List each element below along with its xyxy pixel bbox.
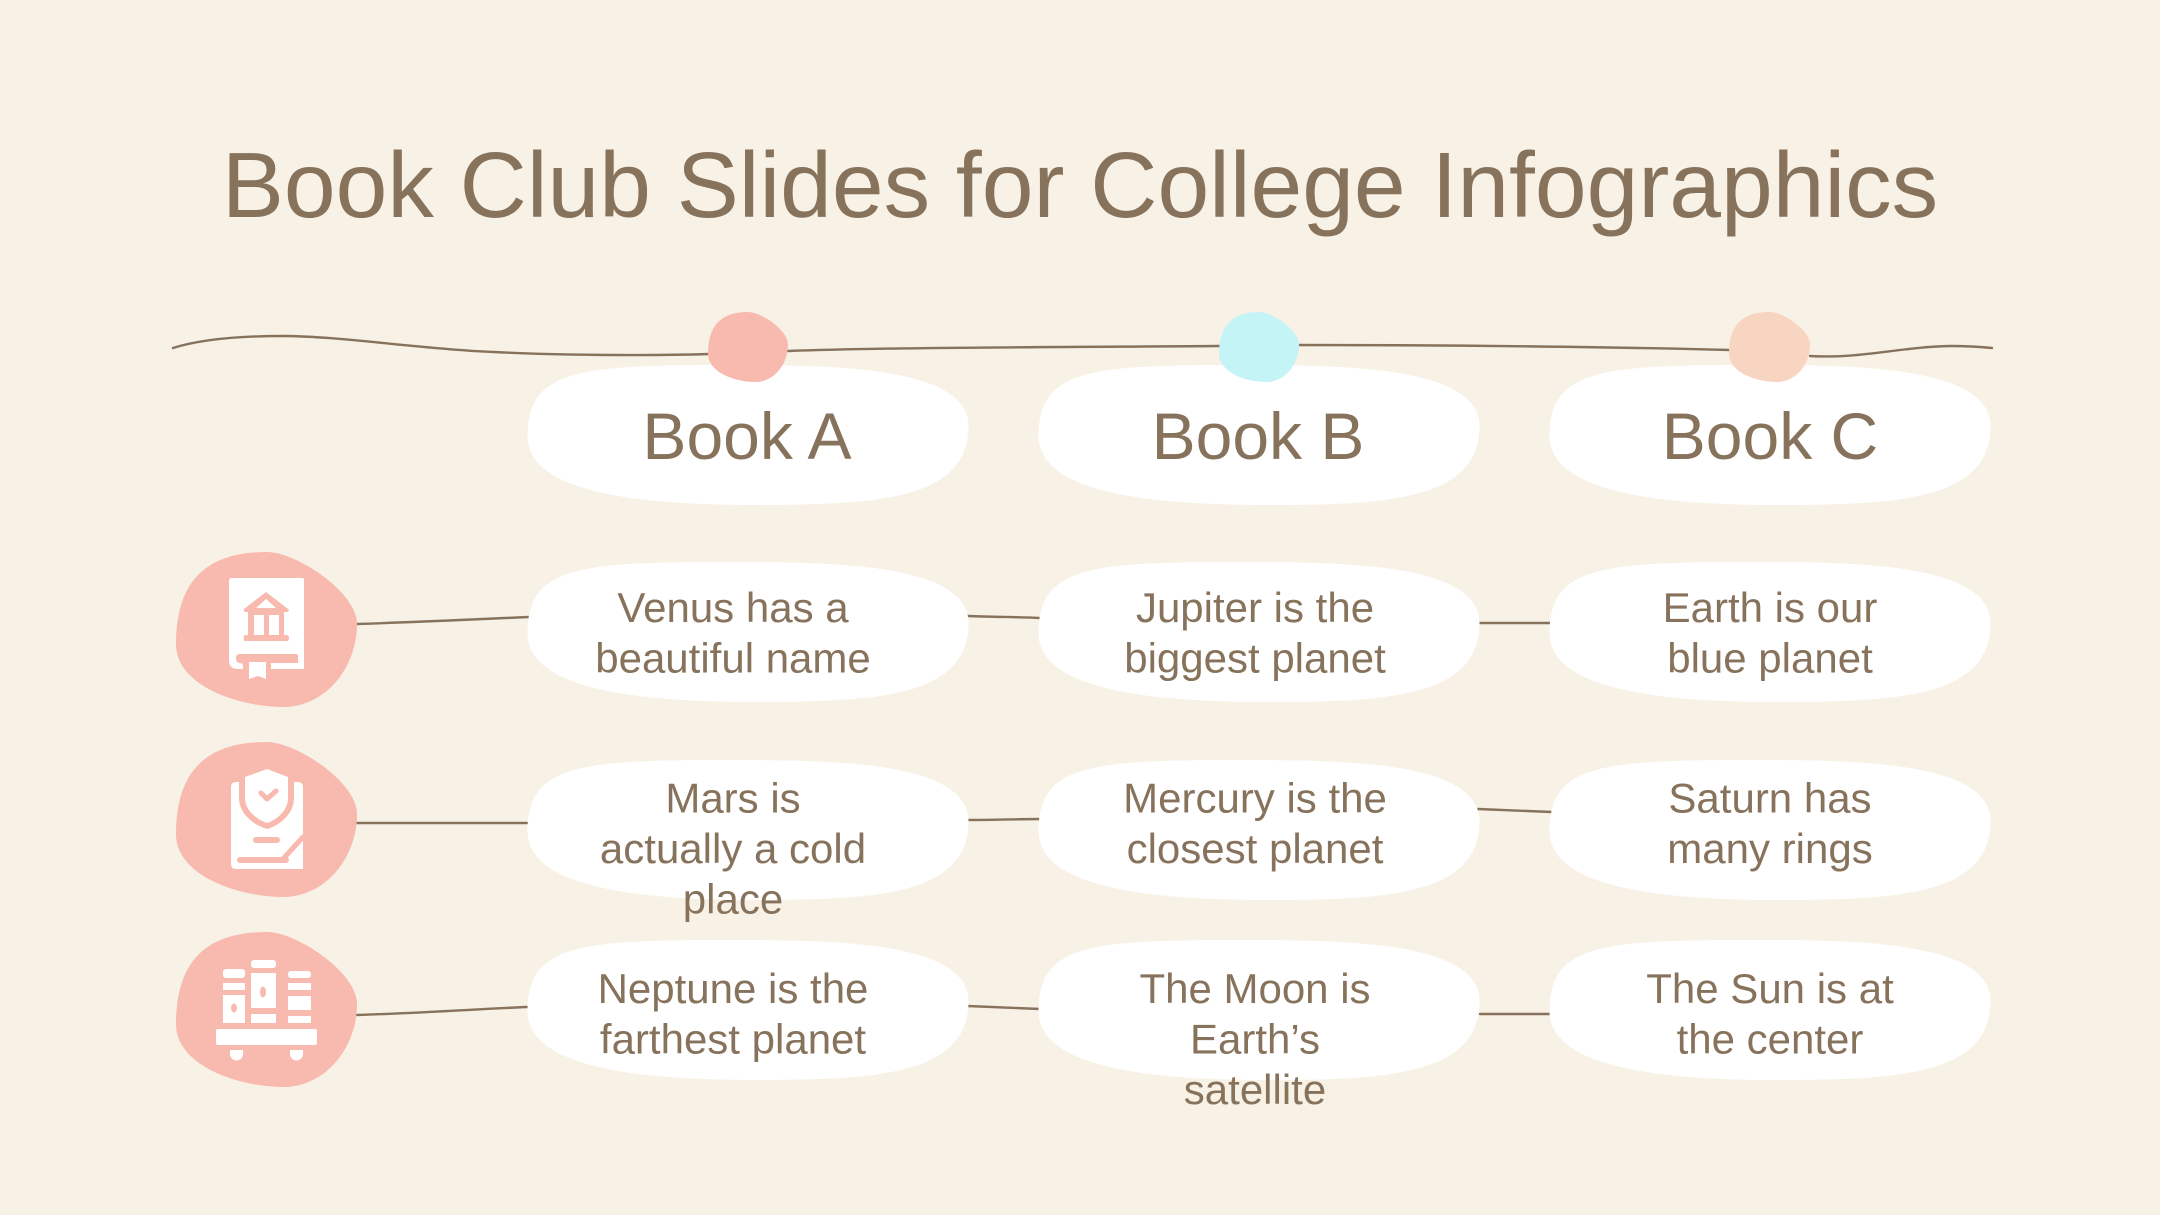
cell: Mercury <box>1038 760 1480 900</box>
cell: Mars: actually a cold <box>600 825 866 872</box>
cell: Neptune <box>528 940 968 1080</box>
cell: Earth: Earth is our <box>1663 584 1877 631</box>
heading: Book B: Book B <box>1152 399 1364 473</box>
title: Book Club Slides for College Infographics <box>222 133 1938 237</box>
cell: Mercury: closest planet <box>1127 825 1384 872</box>
cell: Earth: blue planet <box>1667 634 1873 682</box>
cell: Jupiter: Jupiter is the <box>1136 584 1374 631</box>
icon: book with shield <box>176 742 357 897</box>
panel: Book A header <box>528 365 968 505</box>
cell: Saturn: many rings <box>1667 825 1873 872</box>
cell: Sun: The Sun is at <box>1646 965 1894 1012</box>
connector lines <box>357 616 1552 1015</box>
cell: Neptune: Neptune is the <box>598 965 868 1012</box>
heading: Book C: Book C <box>1662 399 1878 473</box>
icon: book with museum <box>176 552 357 707</box>
cell: Sun <box>1550 940 1990 1080</box>
cell: Mars <box>528 760 968 922</box>
icon: bookshelf <box>176 932 357 1087</box>
panel: Book C header <box>1550 365 1990 505</box>
cell: Saturn: Saturn has <box>1668 774 1872 822</box>
cell: Jupiter: biggest planet <box>1124 634 1386 682</box>
cell: Moon: satellite <box>1184 1066 1326 1113</box>
cell: Mercury: Mercury is the <box>1123 774 1387 822</box>
cell: Mars: Mars is <box>665 774 801 822</box>
cell: Saturn <box>1550 760 1990 900</box>
cell: Venus <box>528 562 968 702</box>
marker: cyan blob <box>1219 312 1299 382</box>
marker: peach blob <box>1729 312 1810 382</box>
marker: pink blob <box>708 312 788 382</box>
cell: Moon <box>1038 940 1480 1113</box>
cell: Moon: The Moon is <box>1139 965 1371 1012</box>
cell: Neptune: farthest planet <box>600 1016 866 1062</box>
cell: Venus: beautiful name <box>595 634 871 682</box>
cell: Earth <box>1550 562 1990 702</box>
cell: Mars: place <box>683 876 783 922</box>
panel: Book B header <box>1038 365 1480 505</box>
cell: Venus: Venus has a <box>617 584 849 631</box>
cell: Moon: Earth’s <box>1190 1016 1320 1062</box>
cell: Sun: the center <box>1677 1016 1863 1062</box>
timeline wavy line <box>173 336 1992 356</box>
cell: Jupiter <box>1038 562 1480 702</box>
heading: Book A: Book A <box>642 399 852 473</box>
